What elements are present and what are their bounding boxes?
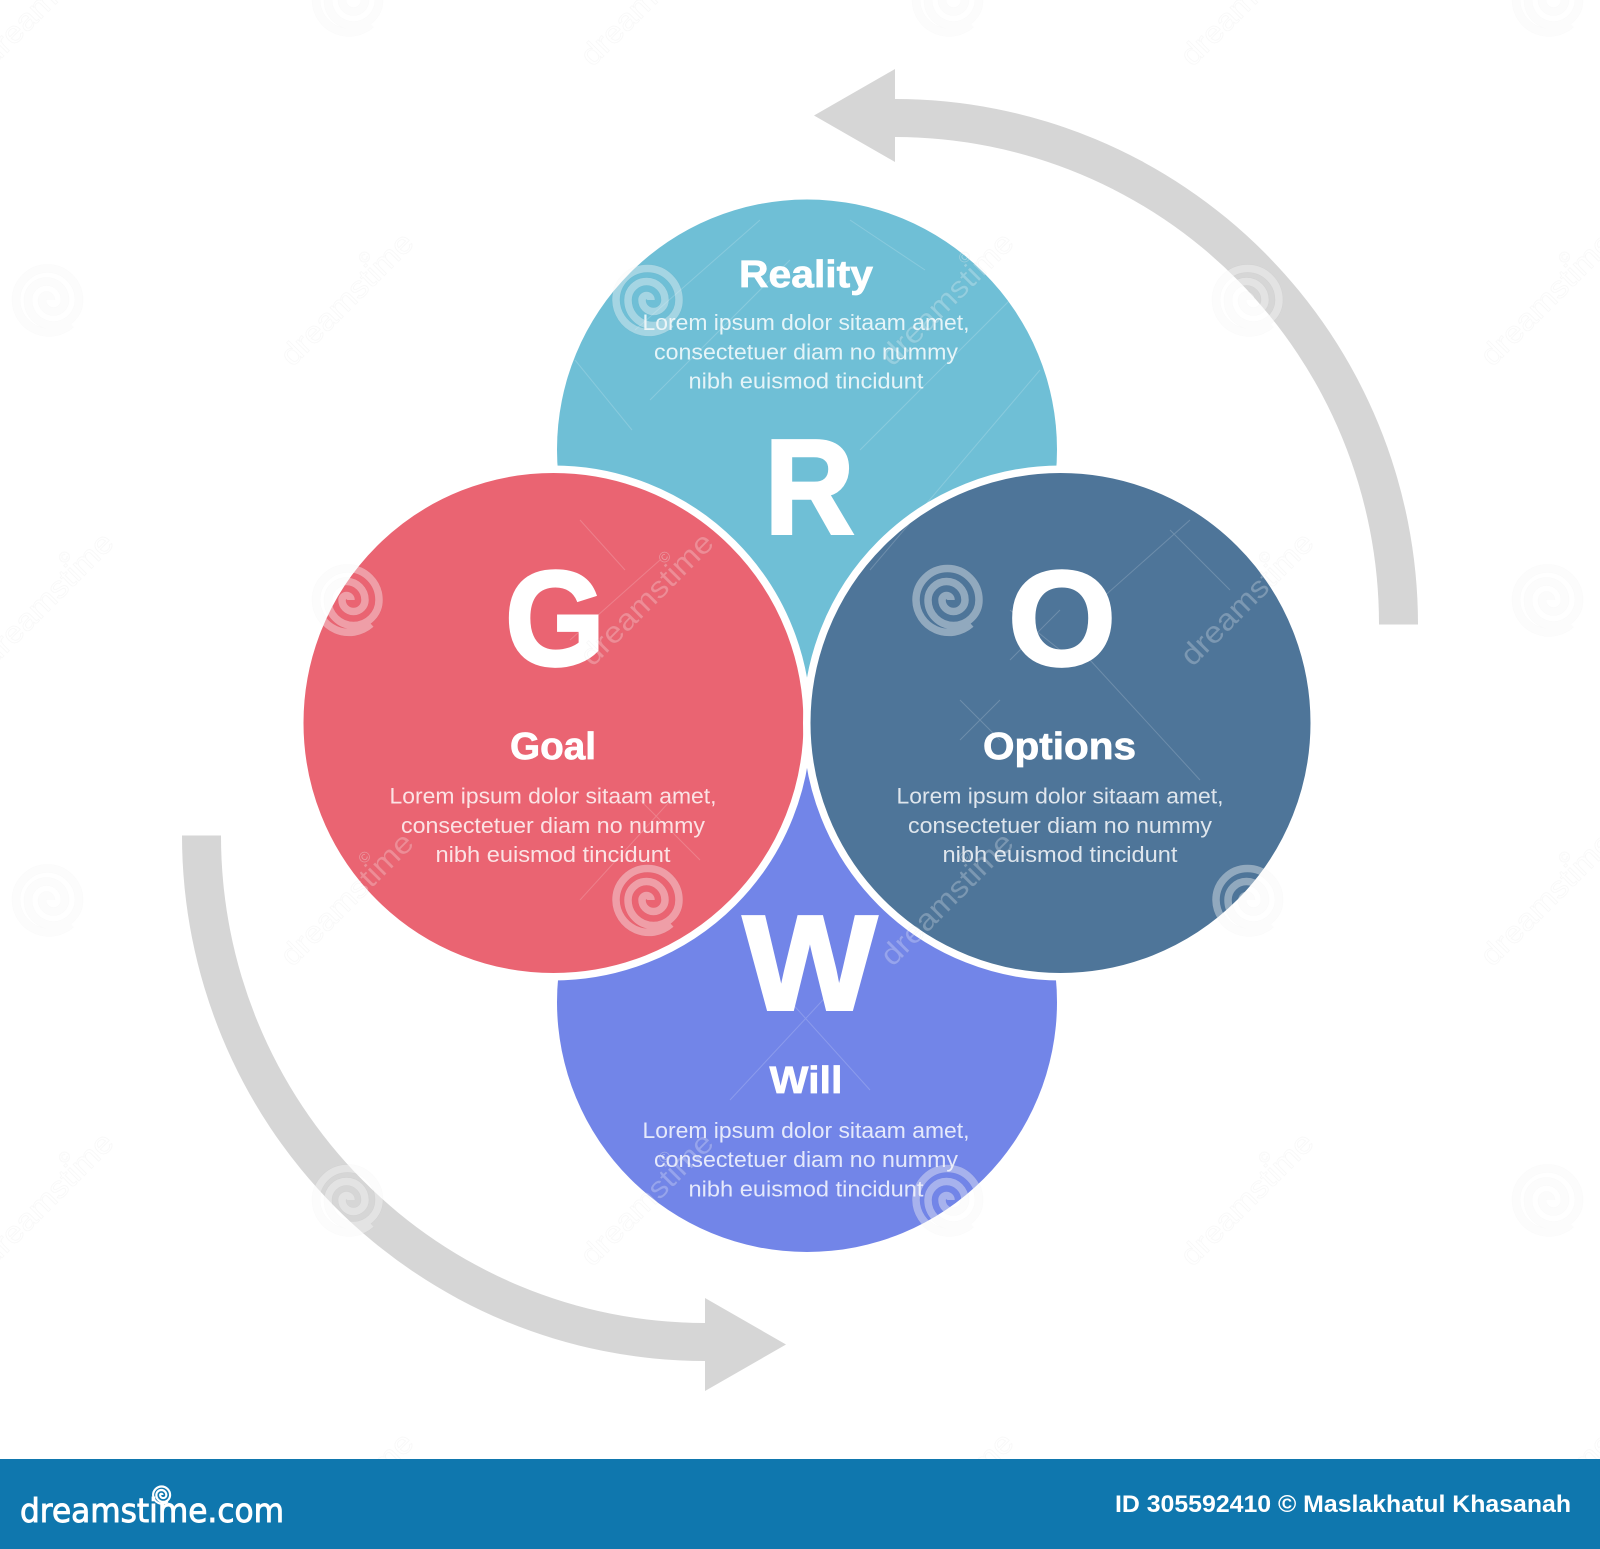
text block: Options description: nibh euismod tincidunt [942,842,1178,867]
heading: Will: Will [770,1060,842,1102]
heading: Options: Options [983,726,1136,768]
arrow: top right curved arrow [814,69,1418,624]
watermark overlay: dreamstime [874,826,1020,972]
watermark overlay: © [1255,1148,1275,1167]
text block: Options description [896,784,1224,867]
letter: R: R [764,412,854,562]
text block: Reality description: consectetuer diam no nummy [654,340,958,364]
text block: Reality description [642,310,970,394]
text block: Will description: nibh euismod tincidunt [688,1176,924,1202]
letter: W: W [743,888,878,1038]
panel: Options [807,469,1314,977]
heading: Goal: Goal [510,726,596,768]
watermark overlay: dreamstime [1174,526,1320,672]
watermark overlay: © [55,1148,75,1167]
watermark overlay: © [955,248,975,267]
text block: Will description: Lorem ipsum dolor sitaam amet, [642,1118,970,1143]
heading: Reality: Reality [739,254,873,296]
watermark overlay: © [955,848,975,867]
text block: Reality description: nibh euismod tincidunt [688,368,924,394]
credit text: ID 305592410 © Maslakhatul Khasanah [1115,1491,1571,1518]
panel: Goal [300,469,807,977]
watermark overlay: © [355,848,375,867]
text block: Will description [642,1118,970,1202]
panel: Reality [557,200,1057,700]
text block: Goal description: consectetuer diam no nummy [401,813,705,838]
watermark overlay: © [1255,548,1275,567]
watermark overlay: dreamstime [274,226,420,372]
text block: Options description: consectetuer diam no nummy [908,813,1212,838]
text block: Options description: Lorem ipsum dolor sitaam amet, [896,784,1224,808]
watermark overlay: © [655,548,675,567]
watermark overlay: © [655,1148,675,1167]
letter: G: G [505,543,605,694]
text block: Goal description: Lorem ipsum dolor sitaam amet, [390,784,716,808]
watermark overlay: dreamstime [874,226,1020,372]
text block: Goal description: nibh euismod tincidunt [436,842,670,867]
watermark overlay: dreamstime [1174,1126,1320,1272]
footer banner [0,1459,1600,1549]
watermark overlay: © [55,548,75,567]
watermark overlay: dreamstime [274,826,420,972]
watermark overlay: dreamstime [574,1126,720,1272]
text block: Reality description: Lorem ipsum dolor sitaam amet, [642,310,970,335]
panel: Will [557,752,1057,1252]
logo: dreamstime.com: dreamstime.com [20,1491,284,1530]
watermark overlay: © [1555,248,1575,267]
text block: Goal description [390,784,716,867]
icon: logo spiral [153,1486,170,1504]
watermark overlay: © [355,248,375,267]
letter: O: O [1008,543,1116,694]
watermark overlay: © [1555,848,1575,867]
watermark overlay: dreamstime [574,526,720,672]
arrow: bottom left curved arrow [182,836,786,1391]
text block: Will description: consectetuer diam no nummy [654,1147,958,1172]
